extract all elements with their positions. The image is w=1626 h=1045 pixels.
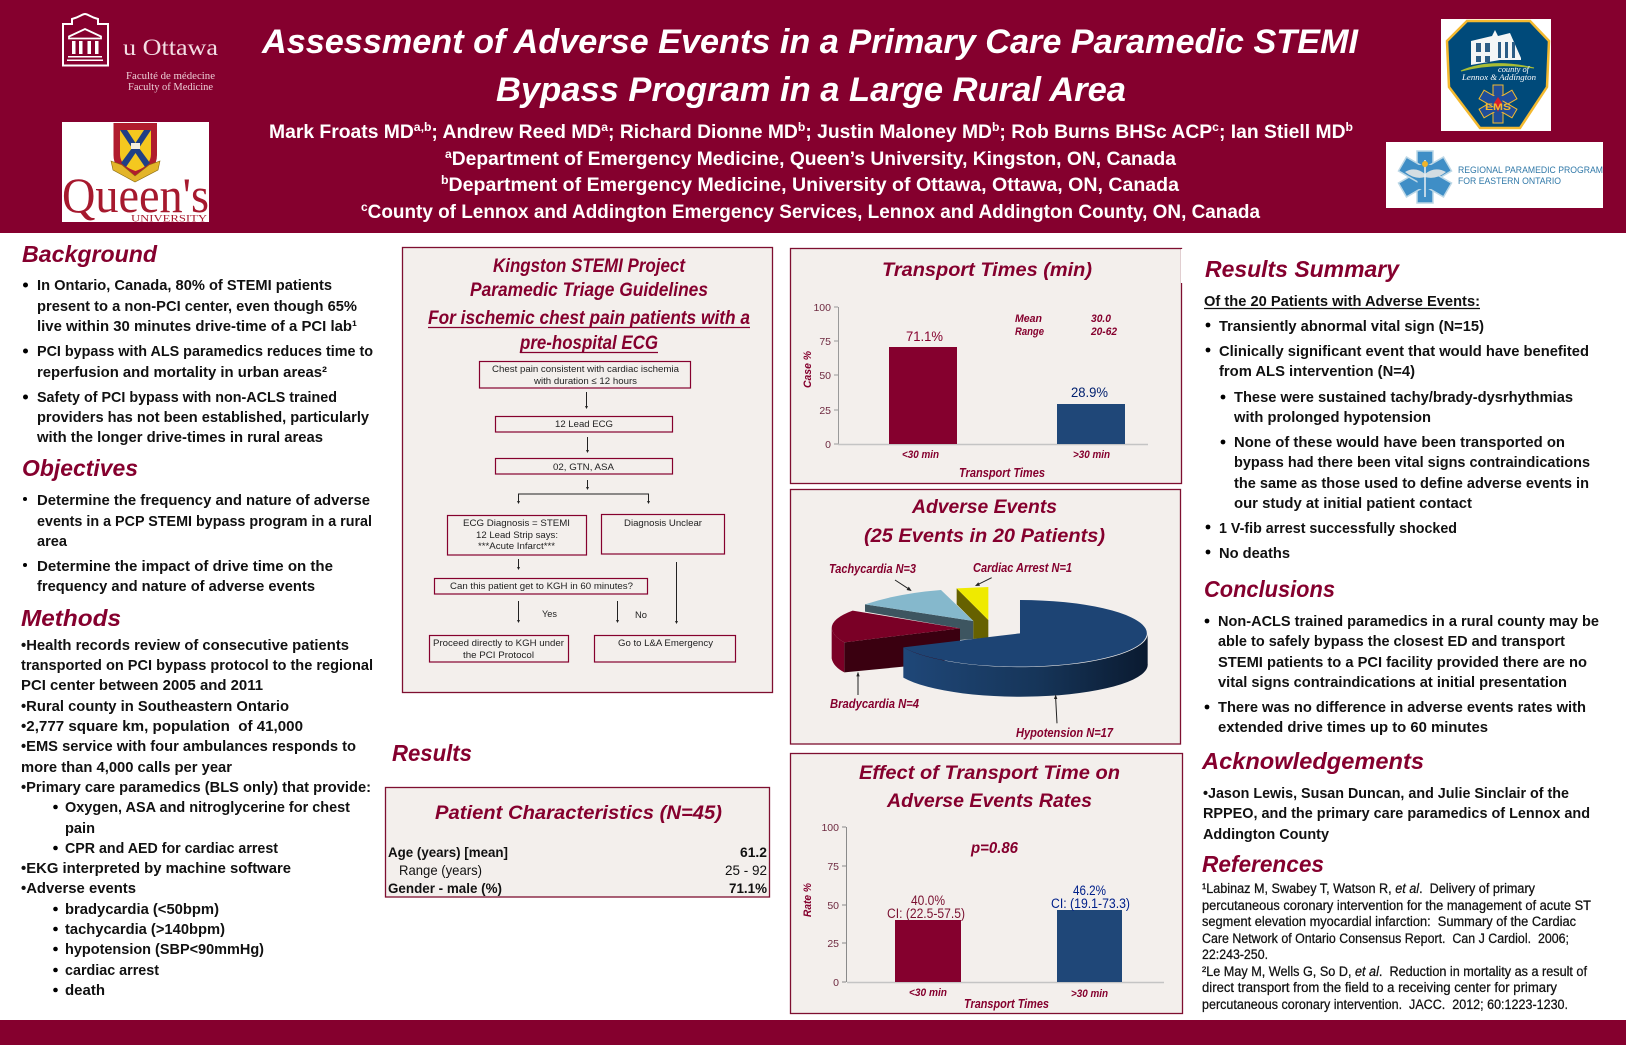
affiliations: Department of Emergency Medicine, Queen’s University, Kingston, ON, Canada bbox=[452, 149, 1176, 170]
heading: Results: Results bbox=[392, 740, 472, 766]
bar chart axes: 25 bbox=[819, 405, 831, 417]
section: Results Summary: our study at initial patient contact bbox=[1234, 495, 1472, 512]
authors: b bbox=[798, 120, 805, 134]
flowchart heading: pre-hospital ECG bbox=[519, 333, 658, 354]
bar: over 30 min bbox=[1057, 385, 1125, 461]
affiliations: b bbox=[441, 173, 449, 187]
section: Methods: •EMS service with four ambulances responds to bbox=[21, 738, 356, 755]
section: References: percutaneous coronary intervention for the management of acute ST bbox=[1202, 898, 1591, 913]
section: Acknowledgements: Addington County bbox=[1203, 826, 1330, 843]
flowchart heading: Kingston STEMI Project bbox=[493, 256, 686, 277]
flowchart steps: No bbox=[635, 610, 647, 621]
authors: ; Justin Maloney MD bbox=[805, 122, 992, 143]
section: Conclusions bbox=[1204, 576, 1599, 736]
affiliations: County of Lennox and Addington Emergency Services, Lennox and Addington County, ON, Canada bbox=[368, 202, 1260, 223]
section: Methods: cardiac arrest bbox=[65, 962, 159, 979]
logo: Regional Paramedic Program: FOR EASTERN ONTARIO bbox=[1458, 176, 1561, 187]
authors: b bbox=[1346, 120, 1353, 134]
panel: adverse events pie: Adverse Events bbox=[911, 497, 1057, 518]
section: Background: present to a non-PCI center, even though 65% bbox=[37, 298, 357, 315]
section: Acknowledgements: •Jason Lewis, Susan Duncan, and Julie Sinclair of the bbox=[1203, 785, 1569, 802]
bar: over 30 min: >30 min bbox=[1071, 988, 1108, 1000]
bar chart axes bbox=[802, 302, 1148, 451]
flowchart steps: 02, GTN, ASA bbox=[553, 462, 615, 473]
authors: a,b bbox=[414, 120, 431, 134]
authors: ; Ian Stiell MD bbox=[1219, 122, 1346, 143]
title: Assessment of Adverse Events in a Primary Care Paramedic STEMI bbox=[261, 23, 1360, 61]
section: Results Summary: These were sustained tachy/brady-dysrhythmias bbox=[1234, 389, 1573, 406]
logo: uOttawa bbox=[63, 14, 218, 93]
authors: ; Richard Dionne MD bbox=[608, 122, 798, 143]
3D pie chart bbox=[832, 578, 1148, 723]
chart axes: 75 bbox=[827, 861, 839, 873]
bar chart axes: 0 bbox=[825, 439, 831, 451]
section: Methods: tachycardia (>140bpm) bbox=[65, 921, 225, 938]
logo: Lennox & Addington EMS: county of bbox=[1498, 65, 1531, 74]
section: References: percutaneous coronary intervention. JACC. 2012; 60:1223-1230. bbox=[1202, 997, 1568, 1012]
flowchart steps: Can this patient get to KGH in 60 minutes? bbox=[450, 581, 633, 592]
section: Background: reperfusion and mortality in urban areas² bbox=[37, 364, 327, 381]
section: Conclusions: vital signs contraindications at initial presentation bbox=[1218, 674, 1567, 691]
section: Results Summary: Of the 20 Patients with Adverse Events: bbox=[1204, 293, 1480, 310]
mean and range note bbox=[1015, 313, 1117, 338]
flowchart steps: the PCI Protocol bbox=[463, 650, 534, 661]
section: Acknowledgements: RPPEO, and the primary care paramedics of Lennox and bbox=[1203, 805, 1590, 822]
flowchart steps: Proceed directly to KGH under bbox=[433, 638, 564, 649]
flowchart steps: Chest pain consistent with cardiac ischemia bbox=[492, 364, 680, 375]
table rows: Range (years) bbox=[399, 862, 482, 878]
logo: Lennox & Addington EMS: Lennox & Addington bbox=[1461, 73, 1536, 82]
flowchart heading bbox=[428, 256, 750, 354]
panel: effect of transport time chart: Effect of Transport Time on bbox=[859, 763, 1120, 784]
bar: over 30 min: CI: (19.1-73.3) bbox=[1051, 896, 1130, 911]
logo: Queen's University bbox=[62, 122, 209, 224]
logo: Queen's University: Queen's bbox=[62, 167, 209, 223]
affiliations bbox=[361, 147, 1260, 223]
panel: effect of transport time chart bbox=[790, 754, 1182, 1014]
bar: under 30 min: 40.0% bbox=[911, 893, 945, 908]
bar: over 30 min: >30 min bbox=[1073, 449, 1110, 461]
affiliations: a bbox=[445, 147, 452, 161]
section: Methods: hypotension (SBP<90mmHg) bbox=[65, 941, 264, 958]
bar chart axes: 100 bbox=[813, 302, 831, 314]
flowchart steps: ECG Diagnosis = STEMI bbox=[463, 518, 570, 529]
authors: b bbox=[992, 120, 999, 134]
chart axes: 25 bbox=[827, 938, 839, 950]
flowchart steps: 12 Lead ECG bbox=[555, 419, 613, 430]
mean and range note: 20-62 bbox=[1090, 326, 1117, 338]
section: Results Summary: with prolonged hypotension bbox=[1233, 409, 1431, 426]
affiliations: c bbox=[361, 200, 368, 214]
logo: Regional Paramedic Program: REGIONAL PARAMEDIC PROGRAM bbox=[1458, 165, 1603, 176]
section: Methods bbox=[21, 605, 373, 999]
bar chart axes: 75 bbox=[819, 336, 831, 348]
section: References: 22:243-250. bbox=[1202, 947, 1268, 962]
section: Results Summary: Transiently abnormal vital sign (N=15) bbox=[1219, 318, 1484, 335]
flowchart arrows bbox=[517, 392, 678, 624]
section: Conclusions: There was no difference in adverse events rates with bbox=[1218, 699, 1586, 716]
authors: a bbox=[601, 120, 608, 134]
section: Methods: more than 4,000 calls per year bbox=[21, 759, 232, 776]
section: Background: providers has not been established, particularly bbox=[37, 409, 370, 426]
section: Objectives: events in a PCP STEMI bypass program in a rural bbox=[37, 513, 372, 530]
panel: adverse events pie bbox=[790, 490, 1180, 744]
section: Results Summary: Clinically significant event that would have benefited bbox=[1219, 343, 1589, 360]
bar: over 30 min: 28.9% bbox=[1071, 385, 1108, 400]
bar chart axes: Case % bbox=[802, 351, 814, 388]
section: Objectives: frequency and nature of adverse events bbox=[37, 578, 315, 595]
section: Conclusions: STEMI patients to a PCI facility provided there are no bbox=[1218, 654, 1587, 671]
table rows bbox=[388, 844, 768, 896]
section: Acknowledgements: Acknowledgements bbox=[1201, 748, 1424, 774]
section: References: References bbox=[1202, 851, 1324, 877]
flowchart steps: Go to L&A Emergency bbox=[618, 638, 713, 649]
section: Conclusions: Conclusions bbox=[1204, 576, 1335, 602]
section: Conclusions: Non-ACLS trained paramedics in a rural county may be bbox=[1218, 613, 1599, 630]
bar: under 30 min bbox=[887, 893, 965, 999]
section: References: Care Network of Ontario Consensus Report. Can J Cardiol. 2006; bbox=[1202, 931, 1569, 946]
flowchart steps bbox=[430, 362, 736, 662]
panel: patient characteristics: Patient Characteristics (N=45) bbox=[435, 803, 722, 824]
chart axes: 0 bbox=[833, 977, 839, 989]
section: Results Summary bbox=[1204, 256, 1590, 562]
panel: effect of transport time chart: Adverse Events Rates bbox=[886, 791, 1092, 812]
panel: effect of transport time chart: p=0.86 bbox=[970, 840, 1018, 857]
section: Objectives: Objectives bbox=[22, 455, 138, 481]
pie labels bbox=[829, 561, 1114, 740]
panel: transport times chart: Transport Times bbox=[959, 466, 1045, 480]
section: Results Summary: bypass had there been vital signs contraindications bbox=[1234, 454, 1590, 471]
section: Results Summary: None of these would have been transported on bbox=[1234, 434, 1565, 451]
section: Background: PCI bypass with ALS paramedics reduces time to bbox=[37, 343, 373, 360]
section: Objectives: Determine the impact of drive time on the bbox=[37, 558, 333, 575]
chart axes bbox=[802, 822, 1164, 989]
chart axes: 50 bbox=[827, 900, 839, 912]
section: Objectives: Determine the frequency and nature of adverse bbox=[37, 492, 370, 509]
footer band bbox=[0, 1020, 1626, 1045]
panel: effect of transport time chart: Transport Times bbox=[964, 997, 1049, 1011]
logo: Lennox & Addington EMS: EMS bbox=[1485, 102, 1511, 112]
bar: under 30 min: <30 min bbox=[909, 987, 947, 999]
section: Background: Safety of PCI bypass with non-ACLS trained bbox=[37, 389, 337, 406]
mean and range note: 30.0 bbox=[1091, 313, 1112, 325]
logo: Lennox & Addington EMS bbox=[1441, 19, 1551, 131]
section: Results Summary: the same as those used to define adverse events in bbox=[1234, 475, 1589, 492]
section: Methods: •2,777 square km, population of 41,000 bbox=[21, 718, 303, 735]
section: References bbox=[1202, 851, 1591, 1012]
section: Background: In Ontario, Canada, 80% of STEMI patients bbox=[37, 277, 332, 294]
bar: under 30 min bbox=[889, 329, 957, 461]
section: Methods: pain bbox=[65, 820, 95, 837]
section: References: direct transport from the field to a receiving center for primary bbox=[1202, 980, 1557, 995]
section: Objectives: area bbox=[37, 533, 68, 550]
bar chart axes: 50 bbox=[819, 370, 831, 382]
bar: under 30 min: <30 min bbox=[902, 449, 939, 461]
section: Methods: Methods bbox=[21, 605, 121, 631]
pie labels: Tachycardia N=3 bbox=[829, 562, 916, 576]
logo: Regional Paramedic Program bbox=[1386, 142, 1603, 208]
authors: ; Andrew Reed MD bbox=[431, 122, 601, 143]
section: Methods: bradycardia (<50bpm) bbox=[65, 901, 219, 918]
section: Results Summary: from ALS intervention (N=4) bbox=[1219, 363, 1415, 380]
flowchart heading: Paramedic Triage Guidelines bbox=[470, 280, 708, 301]
section: References: ²Le May M, Wells G, So D, et al. Reduction in mortality as a result of bbox=[1202, 964, 1587, 979]
section: Methods: CPR and AED for cardiac arrest bbox=[65, 840, 278, 857]
section: Methods: •EKG interpreted by machine software bbox=[21, 860, 291, 877]
logo: uOttawa: Faculty of Medicine bbox=[128, 82, 214, 93]
mean and range note: Range bbox=[1015, 326, 1044, 338]
panel: adverse events pie: (25 Events in 20 Patients) bbox=[864, 526, 1105, 547]
panel: triage flowchart bbox=[402, 248, 772, 692]
logo: Queen's University: UNIVERSITY bbox=[131, 214, 208, 224]
section: Background: Background bbox=[22, 241, 158, 267]
table rows: Age (years) [mean] bbox=[388, 844, 508, 860]
section: Conclusions: extended drive times up to 60 minutes bbox=[1218, 719, 1488, 736]
section: Conclusions: able to safely bypass the closest ED and transport bbox=[1218, 633, 1565, 650]
flowchart steps: Yes bbox=[542, 609, 557, 620]
authors: Mark Froats MD bbox=[269, 122, 412, 143]
affiliations: Department of Emergency Medicine, University of Ottawa, Ottawa, ON, Canada bbox=[449, 175, 1179, 196]
section: Results Summary: No deaths bbox=[1219, 545, 1290, 562]
table rows: 25 - 92 bbox=[725, 862, 767, 878]
pie labels: Hypotension N=17 bbox=[1016, 726, 1114, 740]
mean and range note: Mean bbox=[1015, 313, 1042, 325]
section: References: segment elevation myocardial infarction: Summary of the Cardiac bbox=[1202, 914, 1576, 929]
section: Background bbox=[22, 241, 373, 446]
table rows: 61.2 bbox=[740, 844, 767, 860]
section: Results Summary: Results Summary bbox=[1205, 256, 1400, 282]
flowchart steps: ***Acute Infarct*** bbox=[478, 541, 555, 552]
authors: ; Rob Burns BHSc ACP bbox=[999, 122, 1212, 143]
title: Bypass Program in a Large Rural Area bbox=[496, 71, 1126, 109]
bar: over 30 min bbox=[1051, 883, 1130, 1000]
section: References: ¹Labinaz M, Swabey T, Watson R, et al. Delivery of primary bbox=[1202, 881, 1535, 896]
logo: uOttawa: u Ottawa bbox=[123, 35, 218, 60]
section: Methods: transported on PCI bypass protocol to the regional bbox=[21, 657, 373, 674]
section: Methods: •Rural county in Southeastern Ontario bbox=[21, 698, 289, 715]
table rows: Gender - male (%) bbox=[388, 880, 502, 896]
pie labels: Cardiac Arrest N=1 bbox=[973, 561, 1072, 575]
section: Acknowledgements bbox=[1201, 748, 1590, 843]
flowchart steps: Diagnosis Unclear bbox=[624, 518, 702, 529]
panel: transport times chart bbox=[790, 248, 1182, 484]
flowchart heading: For ischemic chest pain patients with a bbox=[428, 308, 750, 329]
title bbox=[261, 23, 1360, 109]
section: Background: with the longer drive-times in rural areas bbox=[36, 429, 323, 446]
section: Methods: •Health records review of consecutive patients bbox=[21, 637, 349, 654]
table rows: 71.1% bbox=[729, 880, 768, 896]
chart axes: Rate % bbox=[802, 883, 814, 917]
authors: c bbox=[1212, 120, 1219, 134]
section: Methods: •Adverse events bbox=[21, 880, 136, 897]
flowchart steps: with duration ≤ 12 hours bbox=[533, 376, 637, 387]
section: Methods: death bbox=[65, 982, 105, 999]
bar: under 30 min: CI: (22.5-57.5) bbox=[887, 906, 965, 921]
section: Background: live within 30 minutes drive-time of a PCI lab¹ bbox=[37, 318, 357, 335]
section: Methods: Oxygen, ASA and nitroglycerine for chest bbox=[65, 799, 350, 816]
logo: uOttawa: Faculté de médecine bbox=[126, 71, 216, 82]
flowchart steps: 12 Lead Strip says: bbox=[476, 530, 558, 541]
panel: transport times chart: Transport Times (min) bbox=[882, 260, 1092, 281]
section: Results Summary: 1 V-fib arrest successfully shocked bbox=[1219, 520, 1457, 537]
section: Objectives bbox=[22, 455, 372, 595]
bar: under 30 min: 71.1% bbox=[906, 329, 943, 344]
bar: over 30 min: 46.2% bbox=[1073, 883, 1106, 898]
section: Methods: PCI center between 2005 and 2011 bbox=[21, 677, 263, 694]
header banner bbox=[0, 0, 1626, 233]
section: Methods: •Primary care paramedics (BLS only) that provide: bbox=[21, 779, 371, 796]
pie labels: Bradycardia N=4 bbox=[830, 697, 919, 711]
panel: patient characteristics bbox=[386, 788, 770, 897]
chart axes: 100 bbox=[821, 822, 839, 834]
